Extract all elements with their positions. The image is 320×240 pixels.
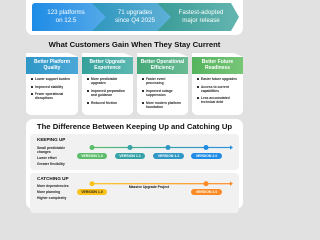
card header	[137, 57, 188, 74]
benefit list	[142, 78, 181, 108]
benefit list: and guidance	[91, 93, 112, 97]
card: operational efficiency	[137, 53, 188, 115]
benefit list: suppression	[146, 93, 166, 97]
timeline: catching up	[90, 181, 233, 186]
panel: difference	[26, 119, 243, 209]
card: future readiness	[192, 53, 243, 115]
card header: Experience	[94, 65, 121, 71]
card header: Readiness	[205, 65, 230, 71]
benefit list: technical debt	[201, 100, 223, 104]
catching up list: Higher complexity	[37, 196, 66, 200]
benefit list: disruptions	[35, 96, 53, 100]
benefit list: upgrades	[91, 81, 106, 85]
card header	[26, 57, 78, 74]
stat: release: Fastest-adopted	[179, 8, 223, 16]
card header: Quality	[44, 65, 60, 71]
version pill 2.0: VERSION 2.0	[196, 190, 217, 194]
version pill 1.0: VERSION 1.0	[81, 154, 103, 158]
benefit list: Faster event	[146, 77, 165, 81]
benefit list: Improved stability	[35, 85, 63, 89]
benefit list: foundation	[146, 105, 163, 109]
stat: upgrades	[115, 8, 155, 24]
label: massive upgrade: Massive Upgrade Project	[129, 185, 169, 189]
card header: Better Platform	[34, 59, 70, 65]
benefit list: Easier future upgrades	[201, 77, 237, 81]
card header: Better Operational	[141, 59, 184, 65]
benefit list: Less accumulated	[201, 96, 230, 100]
catching up list: More dependencies	[37, 184, 69, 188]
version pill 1.0	[77, 153, 107, 159]
card header	[192, 57, 243, 74]
benefit list: Lower support burden	[35, 77, 70, 81]
benefit list: Fewer operational	[35, 92, 63, 96]
benefit list: Improved preparation	[91, 89, 125, 93]
card header: Efficiency	[151, 65, 174, 71]
stat: release: major release	[182, 16, 220, 24]
benefit list: capabilities	[201, 89, 219, 93]
card: platform quality	[26, 53, 78, 115]
stat: upgrades: since Q4 2025	[115, 16, 155, 24]
version pill 2.0: VERSION 2.0	[196, 154, 217, 158]
version pill 1.0	[77, 189, 107, 195]
stat: platforms: on 12.5	[56, 16, 76, 24]
version pill 1.0: VERSION 1.0	[81, 190, 103, 194]
version pill 1.1	[115, 153, 145, 159]
keeping up list: changes	[37, 150, 51, 154]
stat: upgrades: 71 upgrades	[118, 8, 152, 16]
keeping up list: Greater flexibility	[37, 162, 65, 166]
stat: release	[179, 8, 223, 24]
benefit list: More modern platform	[146, 101, 181, 105]
benefit list: Access to current	[201, 85, 229, 89]
benefit list: More predictable	[91, 77, 117, 81]
panel: top stats	[26, 0, 243, 35]
benefit list	[30, 78, 70, 100]
timeline: keeping up	[90, 145, 233, 150]
stat: platforms: 123 platforms	[47, 8, 85, 16]
benefit list: Improved outage	[146, 89, 173, 93]
heading: difference: The Difference Between Keeping Up and Catching Up	[37, 122, 232, 131]
heading: keeping up: KEEPING UP	[37, 137, 65, 142]
keeping up list	[37, 146, 65, 166]
keeping up list: Lower effort	[37, 156, 57, 160]
panel: keeping up	[30, 134, 239, 170]
panel: catching up	[30, 173, 239, 213]
chevron stats	[32, 3, 239, 31]
catching up list	[37, 184, 69, 200]
catching up list: More planning	[37, 190, 60, 194]
benefit list	[86, 78, 125, 104]
version pill 2.0	[191, 189, 222, 195]
card header: Better Upgrade	[89, 59, 126, 65]
heading: customers gain: What Customers Gain When They Stay Current	[49, 40, 220, 48]
stat: platforms	[47, 8, 85, 24]
card header	[82, 57, 133, 74]
card: upgrade experience	[82, 53, 133, 115]
card header: Better Future	[202, 59, 233, 65]
benefit list	[196, 78, 237, 103]
heading: catching up: CATCHING UP	[37, 176, 69, 181]
version pill 1.2	[153, 153, 184, 159]
benefit list: Reduced friction	[91, 101, 117, 105]
benefit list: processing	[146, 81, 164, 85]
version pill 1.2: VERSION 1.2	[158, 154, 179, 158]
keeping up list: Small predictable	[37, 146, 65, 150]
version pill 2.0	[191, 153, 222, 159]
version pill 1.1: VERSION 1.1	[119, 154, 141, 158]
